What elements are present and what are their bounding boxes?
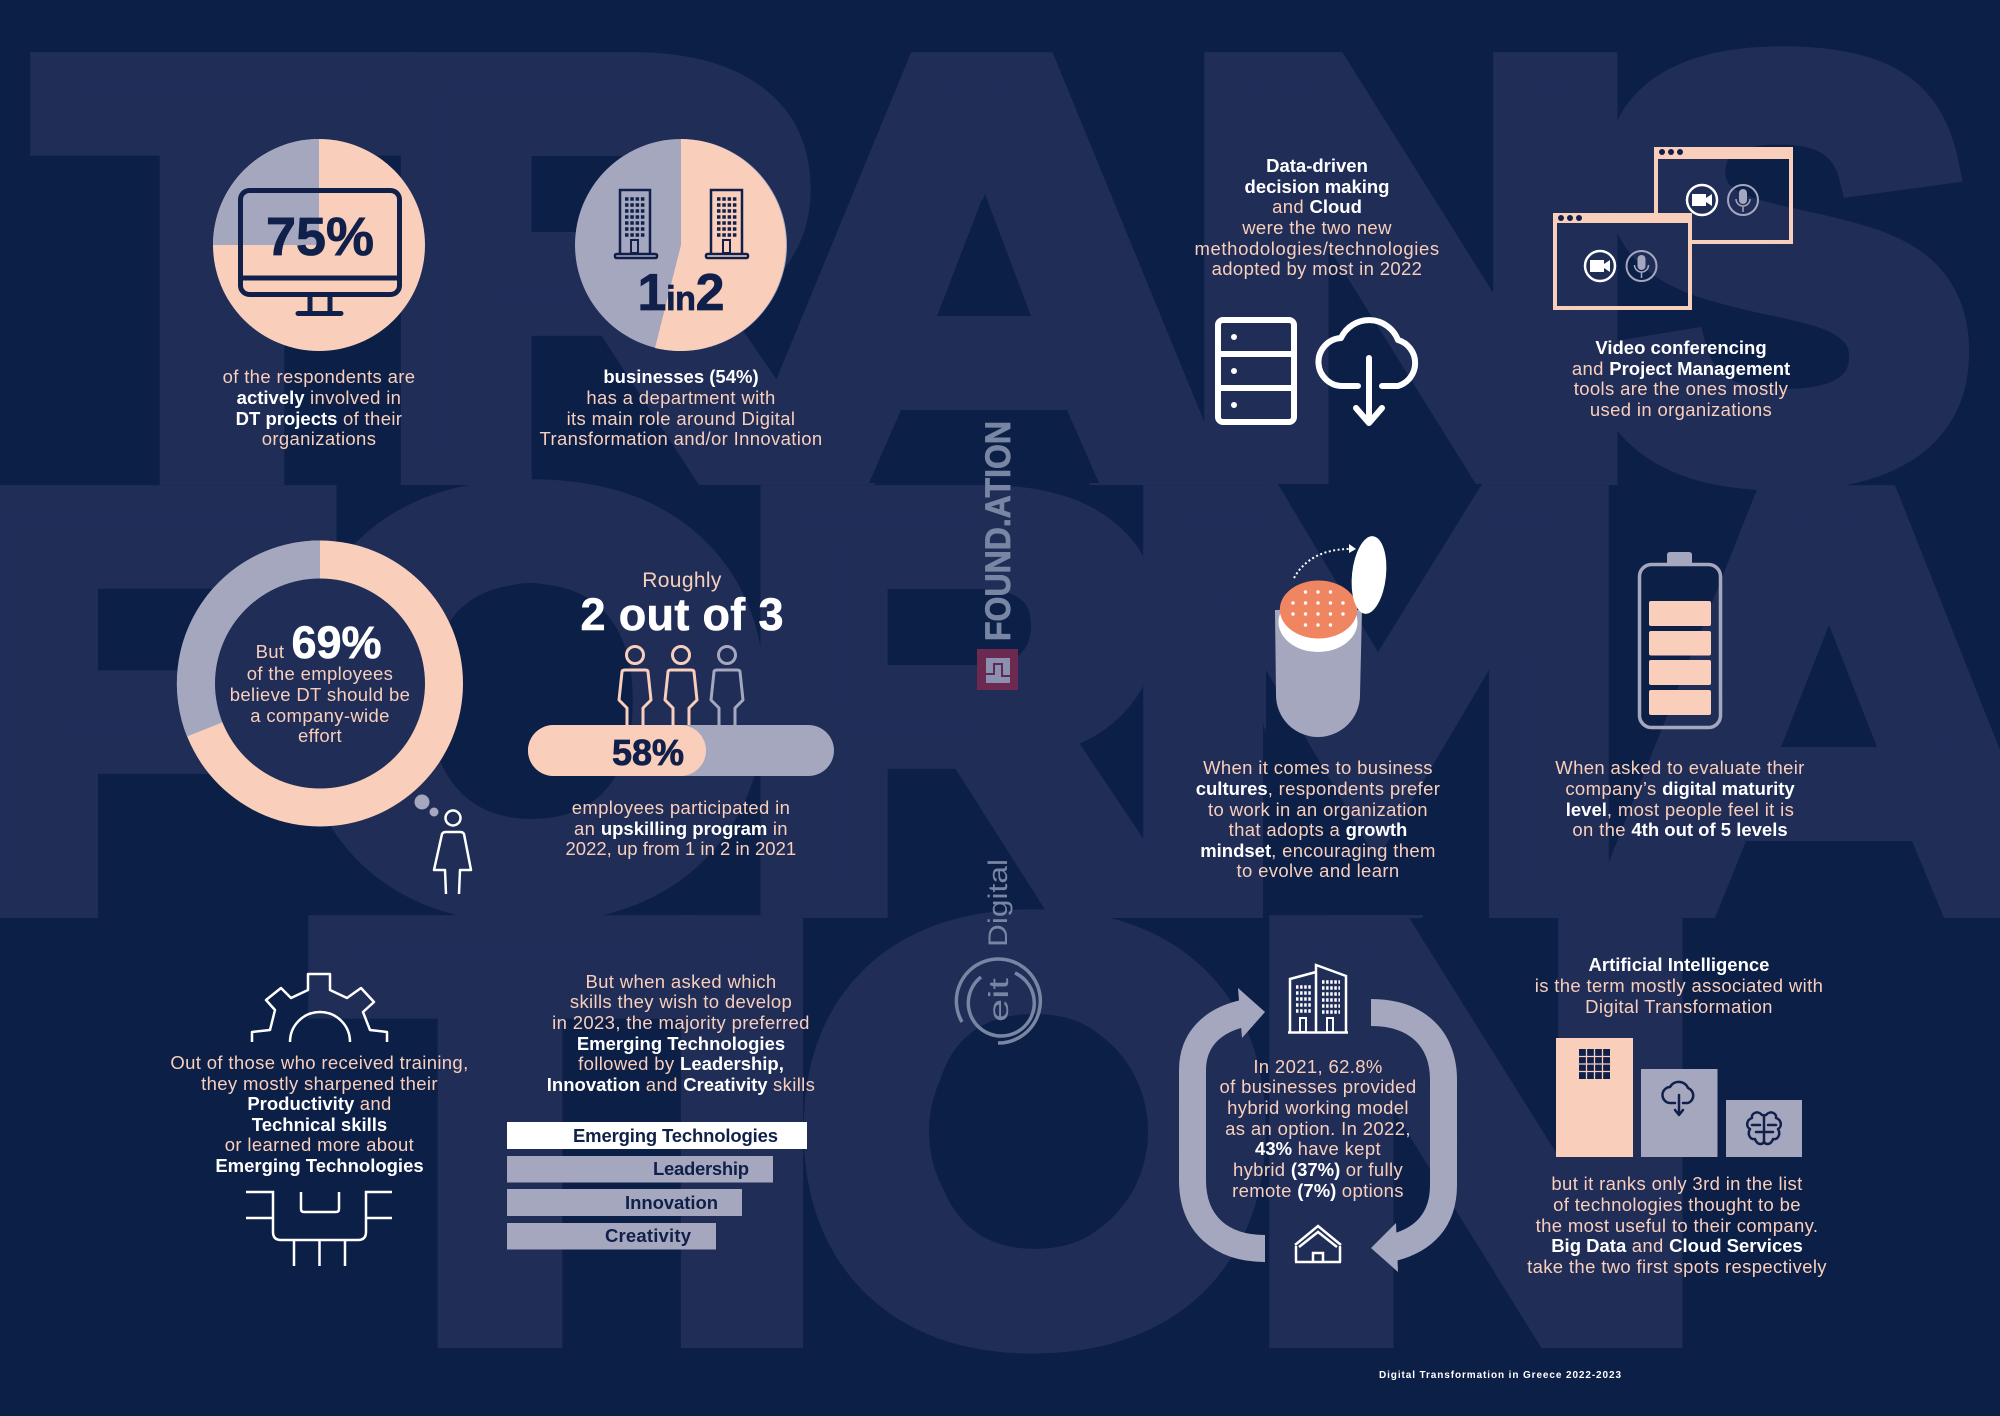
text: data-driven: were the two new: [1241, 217, 1392, 238]
bar: Creativity: Creativity: [605, 1225, 692, 1246]
heading: 2 out of 3: 2 out of 3: [580, 589, 784, 640]
text: upskilling: an upskilling program in: [574, 818, 788, 839]
text: culture: When it comes to business: [1203, 757, 1433, 778]
text: AI ranking: take the two first spots respectively: [1527, 1256, 1827, 1277]
text: video conferencing: used in organizations: [1590, 399, 1772, 420]
text: skills: Innovation and Creativity skills: [547, 1074, 815, 1095]
text: 69% employees: believe DT should be: [230, 684, 410, 705]
text: digital maturity: company’s digital maturity: [1565, 778, 1795, 799]
text: data-driven: Data-driven: [1266, 155, 1368, 176]
stat: 1 in 2: 1in2: [638, 264, 724, 322]
icon: server: [1218, 320, 1294, 422]
text: respondents: organizations: [262, 428, 376, 449]
logo: EIT Food.ation: FOUND.ATION: [979, 421, 1018, 641]
text: AI ranking: but it ranks only 3rd in the list: [1551, 1173, 1803, 1194]
panel: 2 out of 3 upskilling: [528, 569, 834, 859]
text: AI heading: is the term mostly associated with: [1535, 975, 1823, 996]
text: digital maturity: level, most people feel it is: [1566, 799, 1794, 820]
panel: 75% respondents: [213, 139, 425, 449]
text: data-driven: [1194, 155, 1440, 279]
bar: rank 1: [1556, 1038, 1633, 1157]
text: AI heading: Digital Transformation: [1585, 996, 1773, 1017]
icon: window front: [1553, 213, 1692, 308]
icon: building right: [706, 190, 748, 258]
text: AI ranking: the most useful to their company.: [1536, 1215, 1818, 1236]
text: businesses: its main role around Digital: [567, 408, 795, 429]
text: digital maturity: on the 4th out of 5 levels: [1572, 819, 1788, 840]
text: AI ranking: Big Data and Cloud Services: [1551, 1235, 1803, 1256]
text: data-driven: adopted by most in 2022: [1212, 258, 1422, 279]
progress bar: 58%: 58%: [612, 732, 684, 773]
background word: TRANSFORMATION: O: [294, 382, 770, 1020]
text: 69% employees: But: [256, 641, 284, 662]
icon: house: [1295, 1226, 1341, 1262]
text: businesses: businesses (54%): [603, 366, 759, 387]
text: upskilling: [566, 797, 796, 859]
bar: Innovation: [507, 1189, 742, 1216]
text: video conferencing: Video conferencing: [1595, 337, 1767, 358]
bar: Emerging Technologies: [507, 1122, 807, 1149]
arrow: right cycle: [1371, 1012, 1444, 1272]
progress bar: 58%: [528, 725, 834, 776]
text: skills: skills they wish to develop: [570, 991, 792, 1012]
text: hybrid working: [1220, 1056, 1416, 1201]
text: digital maturity: When asked to evaluate their: [1555, 757, 1805, 778]
text: hybrid working: remote (7%) options: [1232, 1180, 1404, 1201]
text: 69% employees: effort: [298, 725, 342, 746]
icon: office buildings: [1288, 965, 1348, 1032]
icon: gear: [252, 974, 387, 1042]
text: culture: [1196, 757, 1440, 881]
text: hybrid working: hybrid (37%) or fully: [1233, 1159, 1403, 1180]
text: training: Out of those who received training,: [170, 1052, 469, 1073]
bar: Leadership: Leadership: [653, 1158, 749, 1179]
bar: Leadership: [507, 1156, 773, 1182]
icon: person 2: [665, 646, 697, 726]
text: culture: that adopts a growth: [1229, 819, 1407, 840]
text: hybrid working: In 2021, 62.8%: [1253, 1056, 1383, 1077]
heading: roughly: Roughly: [642, 569, 722, 592]
text: data-driven: methodologies/technologies: [1194, 238, 1440, 259]
panel: skills: [507, 971, 815, 1250]
donut chart: 69%: [177, 540, 463, 826]
text: culture: cultures, respondents prefer: [1196, 778, 1440, 799]
text: hybrid working: as an option. In 2022,: [1225, 1118, 1411, 1139]
bar: rank 3: [1726, 1100, 1802, 1157]
icon: thinking person: [414, 794, 471, 894]
text: skills: in 2023, the majority preferred: [552, 1012, 810, 1033]
text: upskilling: 2022, up from 1 in 2 in 2021: [566, 838, 796, 859]
bar: Innovation: Innovation: [625, 1192, 718, 1213]
text: skills: Emerging Technologies: [577, 1033, 785, 1054]
text: respondents: of the respondents are: [223, 366, 415, 387]
panel: culture: [1196, 534, 1440, 881]
text: skills: [547, 971, 815, 1095]
text: data-driven: decision making: [1245, 176, 1389, 197]
icon: cloud download: [1318, 320, 1415, 423]
text: respondents: [223, 366, 415, 449]
text: video conferencing: and Project Management: [1572, 358, 1790, 379]
text: businesses: Transformation and/or Innovation: [539, 428, 823, 449]
text: 69% employees: of the employees: [247, 663, 393, 684]
icon: chip: [246, 1192, 392, 1266]
footer: source: Digital Transformation in Greece 2022-2023: [1379, 1370, 1621, 1381]
text: 69% employees: [230, 617, 410, 746]
pie chart: 75%: [213, 139, 425, 351]
panel: artificial intelligence: [1527, 954, 1827, 1277]
bar: rank 2: [1641, 1069, 1718, 1157]
text: training: [170, 1052, 469, 1176]
text: skills: followed by Leadership,: [578, 1053, 784, 1074]
text: respondents: actively involved in: [237, 387, 401, 408]
text: data-driven: and Cloud: [1272, 196, 1362, 217]
logo: EIT Digital: eit: [983, 978, 1014, 1022]
text: 69% employees: a company-wide: [250, 705, 390, 726]
logo: EIT Digital: Digital: [983, 859, 1013, 947]
text: training: Emerging Technologies: [215, 1155, 424, 1176]
bar: Creativity: [507, 1223, 716, 1250]
text: hybrid working: of businesses provided: [1220, 1076, 1416, 1097]
text: skills: But when asked which: [585, 971, 777, 992]
text: 69% employees: 69%: [291, 617, 382, 668]
text: video conferencing: tools are the ones mostly: [1574, 378, 1789, 399]
text: culture: to evolve and learn: [1237, 860, 1399, 881]
background word: TRANSFORMATION: R: [742, 382, 1170, 1020]
background word: TRANSFORMATION: M: [1124, 381, 1628, 1019]
icon: building left: [615, 190, 657, 258]
text: respondents: DT projects of their: [236, 408, 402, 429]
text: culture: to work in an organization: [1208, 799, 1428, 820]
pie chart: 54%: [575, 139, 787, 351]
panel: data-driven and cloud: [1194, 155, 1440, 423]
stat: 75%: 75%: [266, 207, 374, 267]
icon: monitor: [240, 190, 400, 314]
panel: video conferencing: [1553, 147, 1793, 420]
text: upskilling: employees participated in: [572, 797, 790, 818]
text: culture: mindset, encouraging them: [1200, 840, 1436, 861]
panel: digital maturity: [1555, 552, 1805, 840]
icon: battery: [1640, 552, 1720, 728]
text: training: they mostly sharpened their: [201, 1073, 438, 1094]
text: AI ranking: [1527, 1173, 1827, 1277]
text: AI ranking: of technologies thought to be: [1553, 1194, 1801, 1215]
bar: Emerging Technologies: Emerging Technologies: [573, 1125, 778, 1146]
text: training: Productivity and: [247, 1093, 392, 1114]
text: video conferencing: [1572, 337, 1790, 420]
panel: hybrid working: [1192, 965, 1444, 1272]
panel: training: [170, 974, 469, 1266]
text: AI heading: Artificial Intelligence: [1589, 954, 1769, 975]
arrow: left cycle: [1192, 988, 1265, 1248]
panel: 1 in 2 businesses: [539, 139, 823, 449]
logo: EIT Digital: [956, 859, 1040, 1043]
text: hybrid working: hybrid working model: [1227, 1097, 1409, 1118]
icon: window back: [1654, 147, 1793, 242]
icon: container with lid: [1275, 534, 1390, 737]
icon: person 3: [711, 646, 743, 726]
text: training: Technical skills: [252, 1114, 387, 1135]
icon: person 1: [619, 646, 651, 726]
panel: 69% employees: [177, 540, 471, 894]
text: hybrid working: 43% have kept: [1255, 1138, 1381, 1159]
text: businesses: has a department with: [586, 387, 776, 408]
text: AI heading: [1535, 954, 1823, 1017]
text: digital maturity: [1555, 757, 1805, 840]
text: businesses: [539, 366, 823, 449]
text: training: or learned more about: [225, 1134, 414, 1155]
